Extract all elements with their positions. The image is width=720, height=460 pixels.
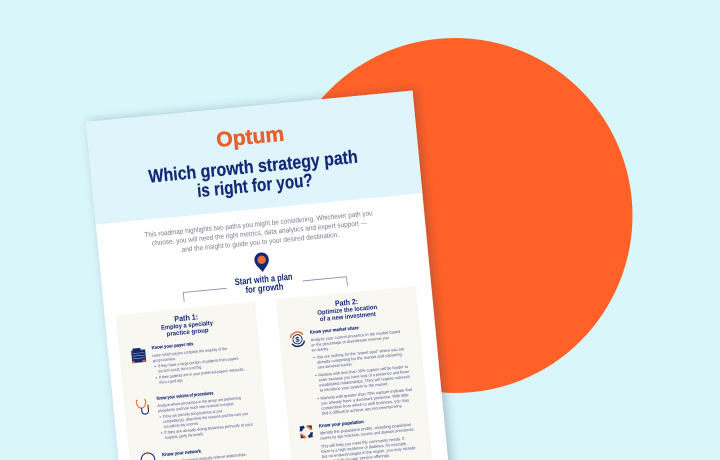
title: Which growth strategy path bbox=[147, 146, 359, 187]
section: know your payer mix bbox=[152, 342, 244, 384]
path 1 heading: Employ a specialty bbox=[161, 320, 214, 332]
section: know your market share: competition from which to shift business, you may bbox=[321, 397, 410, 411]
section: know your payer mix: group's business. bbox=[153, 356, 176, 363]
section: know your market share: Know your market share bbox=[310, 325, 359, 335]
section: know your volume of procedures: hospitals, justify the benefit. bbox=[165, 431, 204, 440]
icon: map pin bbox=[254, 252, 269, 272]
path 2 heading bbox=[318, 298, 377, 322]
section: know your market share: Markets with less than 30% capture will be harder to bbox=[318, 364, 409, 377]
document page bbox=[86, 91, 451, 460]
section: know your population: there is a high incidence of diabetes, for example, bbox=[321, 441, 407, 454]
section: know your payer mix: If they have a large portion of patients from payers bbox=[157, 356, 239, 368]
section: know your population: This will help you meet the community needs. If bbox=[321, 436, 406, 449]
section: know your market share: established relationships. They will require outreach bbox=[319, 374, 411, 388]
heading: start with a plan: for growth bbox=[245, 280, 284, 295]
panel: path 1 bbox=[116, 302, 274, 460]
section: know your payer mix: this is a good sign. bbox=[159, 377, 183, 385]
section: know your population: but no endocrinologist in the region, you may include bbox=[322, 445, 416, 459]
icon: network ring bbox=[140, 451, 156, 460]
path 2 heading: Optimize the location bbox=[317, 304, 378, 317]
section: know your population: Know your population bbox=[319, 419, 364, 428]
section: know your market share: Analyze your current presence in the market based bbox=[310, 329, 401, 342]
icon: buildings bbox=[131, 347, 146, 363]
section: know your network: Know your network bbox=[162, 448, 202, 457]
intro text: choose, you will need the right metrics, data analytics and expert support — bbox=[151, 218, 368, 248]
section: know your volume of procedures: procedures and how much new revenue to expect. bbox=[158, 401, 235, 413]
section: know your market share: Markets with greater than 70% capture indicate that bbox=[320, 387, 413, 401]
section: know your market share: you already have a dominant presence. With little bbox=[321, 392, 410, 406]
section: know your market share: on the percentage of downstream revenue you bbox=[311, 335, 389, 347]
icon: population arrows bbox=[300, 425, 313, 439]
intro text: This roadmap highlights two paths you might be considering. Whichever path you bbox=[144, 208, 373, 239]
section: know your volume of procedures: If they are primarily doing business at your bbox=[163, 408, 223, 419]
icon: dollar cycle bbox=[290, 331, 305, 347]
section: know your market share: enter because you have less of a presence and fewer bbox=[319, 369, 410, 382]
path 1 heading: practice group bbox=[166, 327, 209, 338]
section: know your population: counts by age brackets, income and disease prevalence. bbox=[320, 427, 415, 441]
path 2 heading: Path 2: bbox=[335, 297, 358, 308]
section: know your payer mix: Learn which payers comprise the majority of the bbox=[152, 346, 228, 358]
icon: dollar cycle: $ bbox=[295, 335, 300, 344]
orange circle bbox=[278, 38, 632, 393]
section: know your payer mix: you don't accept, this is a red flag. bbox=[158, 364, 202, 374]
panel: path 2 bbox=[276, 286, 435, 460]
section: know your volume of procedures: Analyze where physicians in the group are performing bbox=[157, 395, 242, 408]
path 1 heading: Path 1: bbox=[174, 312, 199, 324]
section: know your payer mix: Know your payer mix bbox=[151, 341, 194, 350]
heading: start with a plan bbox=[235, 274, 292, 294]
title: is right for you? bbox=[196, 169, 314, 201]
path 1 heading bbox=[161, 314, 213, 338]
section: know your volume of procedures: If they are already doing business primarily at your bbox=[164, 421, 254, 435]
connector right bbox=[302, 276, 348, 286]
section: know your payer mix: If their patients are in your preferred payers' networks, bbox=[159, 366, 245, 380]
section: know your volume of procedures: can address any concerns. bbox=[164, 421, 199, 429]
section: know your population bbox=[318, 420, 416, 460]
section: know your market share: to introduce your system to the market. bbox=[320, 381, 389, 393]
connector left bbox=[183, 288, 227, 302]
section: know your volume of procedures: Know your volume of procedures bbox=[156, 390, 214, 401]
heading: start with a plan: Start with a plan bbox=[234, 271, 293, 287]
logo: Optum: Optum bbox=[215, 123, 285, 152]
header band bbox=[86, 91, 422, 225]
section: know your volume of procedures: competitor(s), determine the reasons and the care you bbox=[163, 411, 248, 424]
section: know your market share: some downstream business. bbox=[317, 361, 353, 370]
section: know your volume of procedures bbox=[156, 392, 253, 440]
section: know your market share: find it difficult to achieve any incremental wins. bbox=[322, 403, 403, 416]
section: know your market share: are capturing. bbox=[311, 346, 329, 353]
section: know your market share: already competing for the market and capturing bbox=[317, 351, 403, 365]
section: know your population: Identify the population profile, including population bbox=[319, 422, 412, 436]
path 2 heading: of a new investment bbox=[320, 311, 377, 323]
title bbox=[148, 150, 358, 198]
section: know your market share: You are looking for the "sweet spot" where you are bbox=[316, 346, 405, 360]
section: know your market share bbox=[310, 321, 415, 416]
intro text: and the insight to guide you to your desired destination. bbox=[181, 230, 339, 254]
icon: stethoscope bbox=[136, 399, 150, 415]
